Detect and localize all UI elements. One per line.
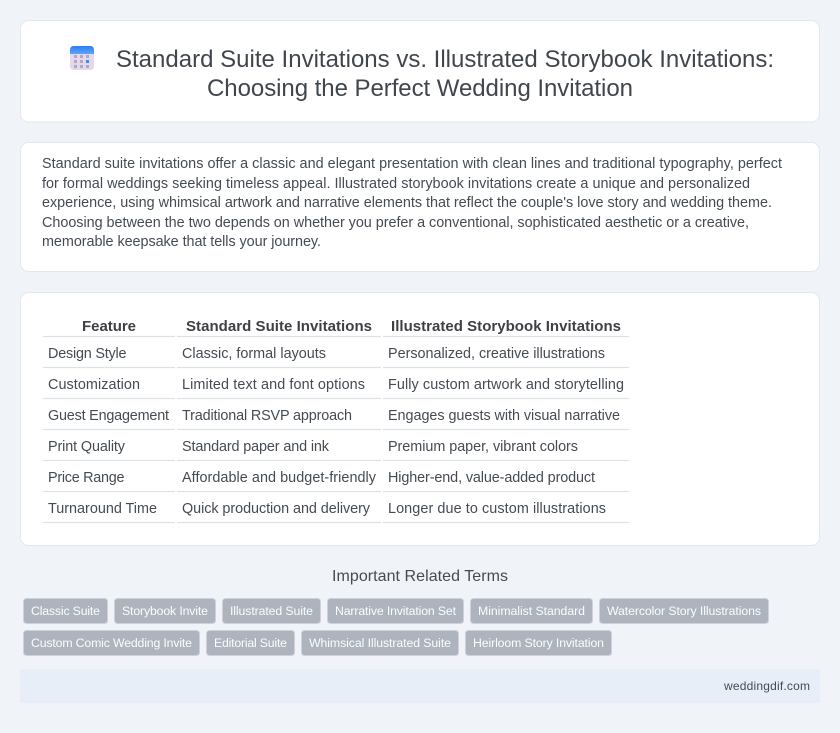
tag: classic suite xyxy=(24,598,108,624)
tag: minimalist standard xyxy=(470,598,592,624)
row: price range: Price Range xyxy=(48,470,124,486)
row: print quality: Print Quality xyxy=(48,439,126,455)
row: print quality xyxy=(48,439,578,455)
table header: Illustrated Storybook Invitations xyxy=(391,318,621,335)
tag: editorial suite: Editorial Suite xyxy=(214,636,287,650)
tag: custom comic wedding invite xyxy=(24,630,200,656)
tag: narrative invitation set: Narrative Invitation Set xyxy=(335,604,457,618)
tag: editorial suite xyxy=(206,630,294,656)
tag: heirloom story invitation: Heirloom Story Invitation xyxy=(473,636,604,650)
text block: introduction: memorable keepsake that tells your journey. xyxy=(42,234,321,250)
tag: illustrated suite xyxy=(222,598,320,624)
tag: narrative invitation set xyxy=(328,598,464,624)
panel: comparison table xyxy=(20,292,820,546)
panel: title header xyxy=(20,20,820,122)
tag list: related terms xyxy=(24,598,768,656)
tag: storybook invite xyxy=(114,598,216,624)
row: turnaround time: Quick production and delivery xyxy=(182,501,371,517)
table header: Feature xyxy=(82,318,136,335)
table header xyxy=(82,318,621,335)
tag: minimalist standard: Minimalist Standard xyxy=(478,604,585,618)
row: design style: Design Style xyxy=(48,346,126,362)
footer: weddingdif.com xyxy=(723,679,810,693)
icon: calendar xyxy=(70,46,94,70)
row: price range xyxy=(48,470,595,486)
tag: storybook invite: Storybook Invite xyxy=(122,604,208,618)
row: guest engagement xyxy=(48,408,620,424)
row: price range: Affordable and budget-friendly xyxy=(182,470,377,486)
text block: introduction: Standard suite invitations offer a classic and elegant presentation with clean lines and traditional typography, perfect xyxy=(42,156,782,172)
tag: custom comic wedding invite: Custom Comic Wedding Invite xyxy=(31,636,192,650)
table header: Standard Suite Invitations xyxy=(186,318,372,335)
row: customization: Limited text and font options xyxy=(182,377,365,393)
text block: introduction xyxy=(42,156,782,250)
row: customization: Fully custom artwork and storytelling xyxy=(388,377,624,393)
panel: introduction text xyxy=(20,142,820,272)
title: Choosing the Perfect Wedding Invitation xyxy=(207,75,633,102)
text block: introduction: Choosing between the two depends on whether you prefer a conventional, sophisticated aesthetic or a creative, xyxy=(42,215,749,231)
row: price range: Higher-end, value-added product xyxy=(388,470,595,486)
row: turnaround time: Longer due to custom illustrations xyxy=(388,501,606,517)
row: print quality: Standard paper and ink xyxy=(182,439,330,455)
tag: illustrated suite: Illustrated Suite xyxy=(230,604,313,618)
row: guest engagement: Traditional RSVP approach xyxy=(182,408,352,424)
footer xyxy=(20,669,820,703)
row: design style xyxy=(48,346,605,362)
tag: heirloom story invitation xyxy=(466,630,612,656)
title: Standard Suite Invitations vs. Illustrated Storybook Invitations: xyxy=(116,46,774,73)
row: turnaround time xyxy=(48,501,606,517)
row: turnaround time: Turnaround Time xyxy=(48,501,157,517)
row: design style: Classic, formal layouts xyxy=(182,346,326,362)
row: design style: Personalized, creative illustrations xyxy=(388,346,605,362)
row: guest engagement: Guest Engagement xyxy=(48,408,169,424)
row: customization xyxy=(48,377,624,393)
row: customization: Customization xyxy=(48,377,140,393)
tag: watercolor story illustrations: Watercolor Story Illustrations xyxy=(607,604,761,618)
title xyxy=(116,46,774,102)
tag: watercolor story illustrations xyxy=(600,598,768,624)
text block: introduction: experience, using whimsical artwork and narrative elements that reflect the couple's love story and wedding theme. xyxy=(42,195,772,211)
tag: whimsical illustrated suite: Whimsical Illustrated Suite xyxy=(309,636,451,650)
row: print quality: Premium paper, vibrant colors xyxy=(388,439,578,455)
row: guest engagement: Engages guests with visual narrative xyxy=(388,408,620,424)
text block: introduction: for formal weddings seeking timeless appeal. Illustrated storybook invitations create a unique and personalized xyxy=(42,176,750,192)
heading: important related terms: Important Related Terms xyxy=(332,568,508,585)
tag: whimsical illustrated suite xyxy=(302,630,458,656)
tag: classic suite: Classic Suite xyxy=(31,604,100,618)
